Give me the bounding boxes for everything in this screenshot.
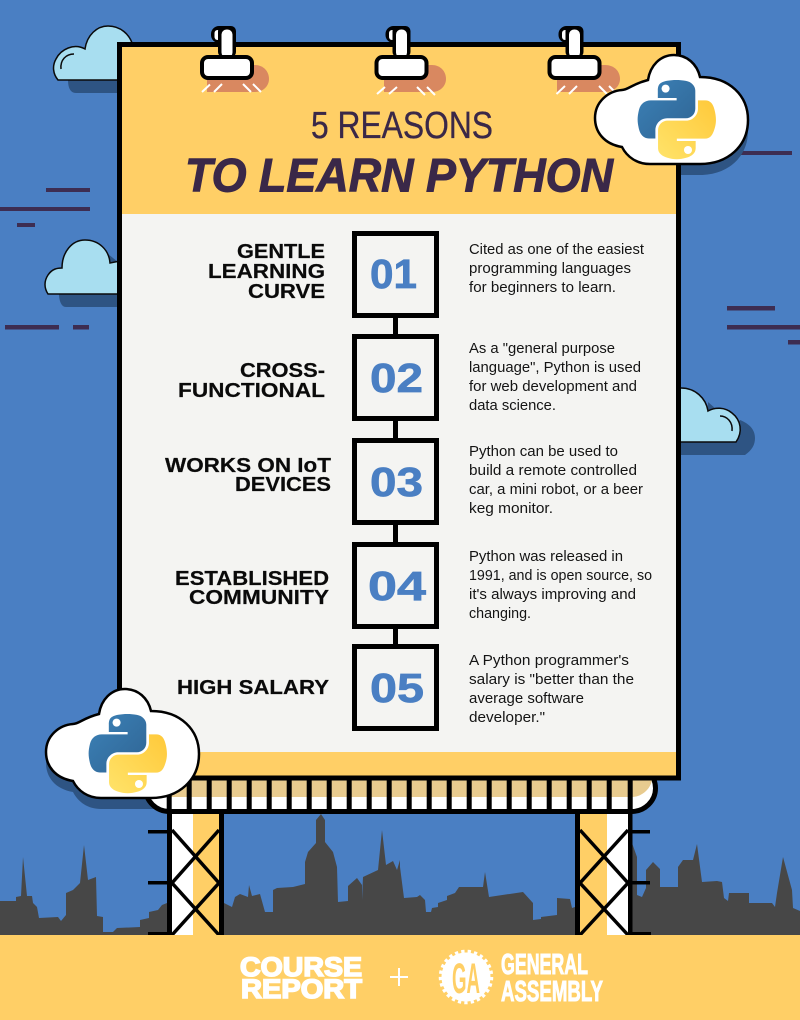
reason 3 number box (354, 440, 436, 522)
logo: General Assembly badge: GA (452, 955, 480, 1003)
reason 2 description: As a "general purpose (469, 341, 615, 357)
reason 3 description: Python can be used to (469, 444, 618, 460)
reason 2 heading: FUNCTIONAL (178, 380, 325, 402)
reason 1 description (469, 242, 644, 296)
logo: Course Report (240, 952, 363, 1004)
billboard walkway (146, 765, 656, 812)
connector between number boxes (393, 316, 398, 646)
reason 5 description: average software (469, 691, 584, 707)
reason 5 number box (354, 646, 436, 728)
title (185, 105, 614, 202)
reason 1 description: Cited as one of the easiest (469, 242, 644, 258)
reason 5 heading: HIGH SALARY (177, 677, 330, 699)
logo: General Assembly wordmark: ASSEMBLY (501, 976, 603, 1008)
reason 1 heading: CURVE (248, 281, 325, 303)
plus sign (390, 968, 408, 986)
footer band (0, 935, 800, 1020)
logo: General Assembly badge (440, 952, 492, 1003)
python cloud: top right (595, 55, 748, 164)
reason 4 heading (175, 568, 330, 609)
reason 1 number box: 01 (370, 251, 417, 297)
cloud: middle left (45, 240, 125, 307)
reason 3 description: build a remote controlled (469, 463, 637, 479)
logo: General Assembly wordmark: GENERAL (501, 949, 588, 981)
reason 2 number box (354, 336, 436, 418)
reason 5 (177, 646, 634, 728)
reason 3 number box: 03 (370, 459, 423, 505)
reason 4 description: it's always improving and (469, 587, 636, 603)
billboard panel (120, 44, 678, 778)
reason 2 description: language", Python is used (469, 360, 641, 376)
billboard lamp: right (550, 26, 620, 94)
reason 1 heading: GENTLE (237, 241, 325, 263)
speed lines: right (727, 151, 800, 344)
reason 4 heading: ESTABLISHED (175, 568, 329, 590)
reason 1 heading: LEARNING (208, 261, 325, 283)
reason 4 heading: COMMUNITY (189, 587, 330, 609)
reason 1 heading (208, 241, 325, 303)
reason 5 description: developer." (469, 710, 545, 726)
reason 3 (165, 440, 643, 522)
speed lines: left lower (5, 325, 89, 330)
reason 3 heading (165, 455, 331, 496)
reason 4 number box (354, 544, 436, 626)
reason 5 description: A Python programmer's (469, 653, 629, 669)
python logo (638, 80, 716, 159)
reason 1 number box (354, 234, 436, 316)
python logo (89, 714, 167, 793)
logo: Course Report: COURSE (240, 952, 362, 982)
cloud: middle right (670, 388, 755, 455)
speed lines: left upper (0, 188, 90, 227)
reason 2 number box: 02 (370, 355, 423, 401)
title line 1: 5 REASONS (311, 105, 493, 147)
reason 4 description: changing. (469, 606, 531, 622)
reason 4 description (469, 549, 652, 622)
reason 4 number box: 04 (368, 563, 426, 609)
reason 2 heading: CROSS- (240, 360, 325, 382)
reason 4 description: Python was released in (469, 549, 623, 565)
reason 3 description (469, 444, 643, 517)
skyline (0, 814, 800, 936)
billboard lamp: left (202, 26, 269, 92)
logo: Course Report: REPORT (241, 974, 363, 1004)
reason 2 (178, 336, 641, 418)
reason 5 description: salary is "better than the (469, 672, 634, 688)
cloud: top left (54, 26, 133, 93)
shadow of python clouds (46, 66, 748, 809)
reason 4 description: 1991, and is open source, so (469, 568, 652, 584)
billboard lamp: middle (376, 26, 446, 95)
reason 2 description: data science. (469, 398, 556, 414)
logo: General Assembly wordmark (501, 949, 603, 1008)
reason 2 description: for web development and (469, 379, 637, 395)
reason 3 heading: WORKS ON IoT (165, 455, 331, 477)
reason 1 description: programming languages (469, 261, 631, 277)
billboard leg: left (148, 812, 224, 936)
python cloud: bottom left (46, 689, 199, 798)
reason 4 (175, 544, 652, 626)
reason 3 description: car, a mini robot, or a beer (469, 482, 643, 498)
reason 5 description (469, 653, 634, 726)
reason 3 description: keg monitor. (469, 501, 553, 517)
reason 1 description: for beginners to learn. (469, 280, 616, 296)
reason 2 description (469, 341, 641, 414)
reason 2 heading (178, 360, 325, 402)
billboard leg: right (575, 812, 651, 936)
reason 3 heading: DEVICES (235, 474, 331, 496)
reason 1 (208, 234, 644, 316)
reason 5 number box: 05 (370, 665, 424, 711)
title line 2: TO LEARN PYTHON (185, 148, 614, 202)
